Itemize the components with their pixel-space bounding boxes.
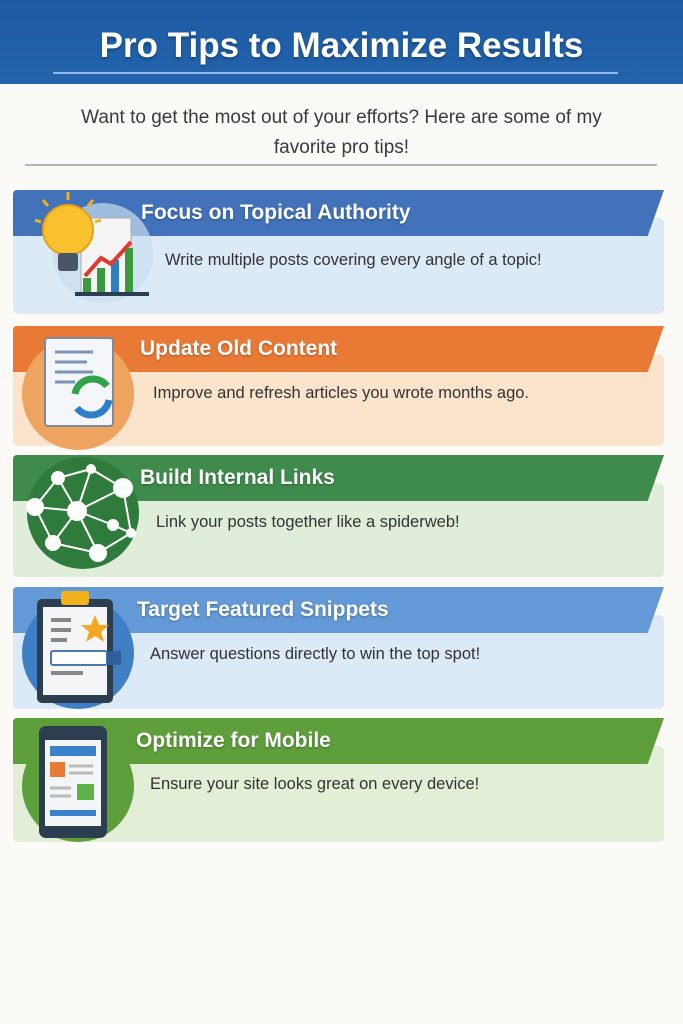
heading: Optimize for Mobile: [136, 729, 331, 752]
heading: Update Old Content: [140, 337, 337, 360]
heading: Build Internal Links: [140, 466, 335, 489]
intro text: Want to get the most out of your efforts? Here are some of my: [81, 107, 602, 128]
icon: lightbulb chart: [34, 192, 153, 303]
panel: topical authority: [13, 190, 664, 314]
icon: network web: [26, 457, 139, 569]
text: Improve and refresh articles you wrote months ago.: [153, 384, 529, 402]
icon: document refresh: [22, 337, 134, 450]
text: Answer questions directly to win the top spot!: [150, 645, 480, 663]
text: Link your posts together like a spiderweb!: [156, 513, 460, 531]
text: Write multiple posts covering every angle of a topic!: [165, 251, 542, 269]
intro text: favorite pro tips!: [274, 137, 409, 158]
icon: clipboard search: [22, 591, 134, 709]
intro text: [81, 107, 602, 158]
header banner: [0, 0, 683, 84]
heading: Target Featured Snippets: [137, 598, 389, 621]
icon: smartphone: [22, 726, 134, 842]
title: Pro Tips to Maximize Results: [100, 26, 583, 65]
panel: update content: [13, 326, 664, 450]
heading: Focus on Topical Authority: [141, 201, 410, 224]
panel: featured snippets: [13, 587, 664, 709]
panel: mobile: [13, 718, 664, 842]
text: Ensure your site looks great on every device!: [150, 775, 479, 793]
panel: internal links: [13, 455, 664, 577]
